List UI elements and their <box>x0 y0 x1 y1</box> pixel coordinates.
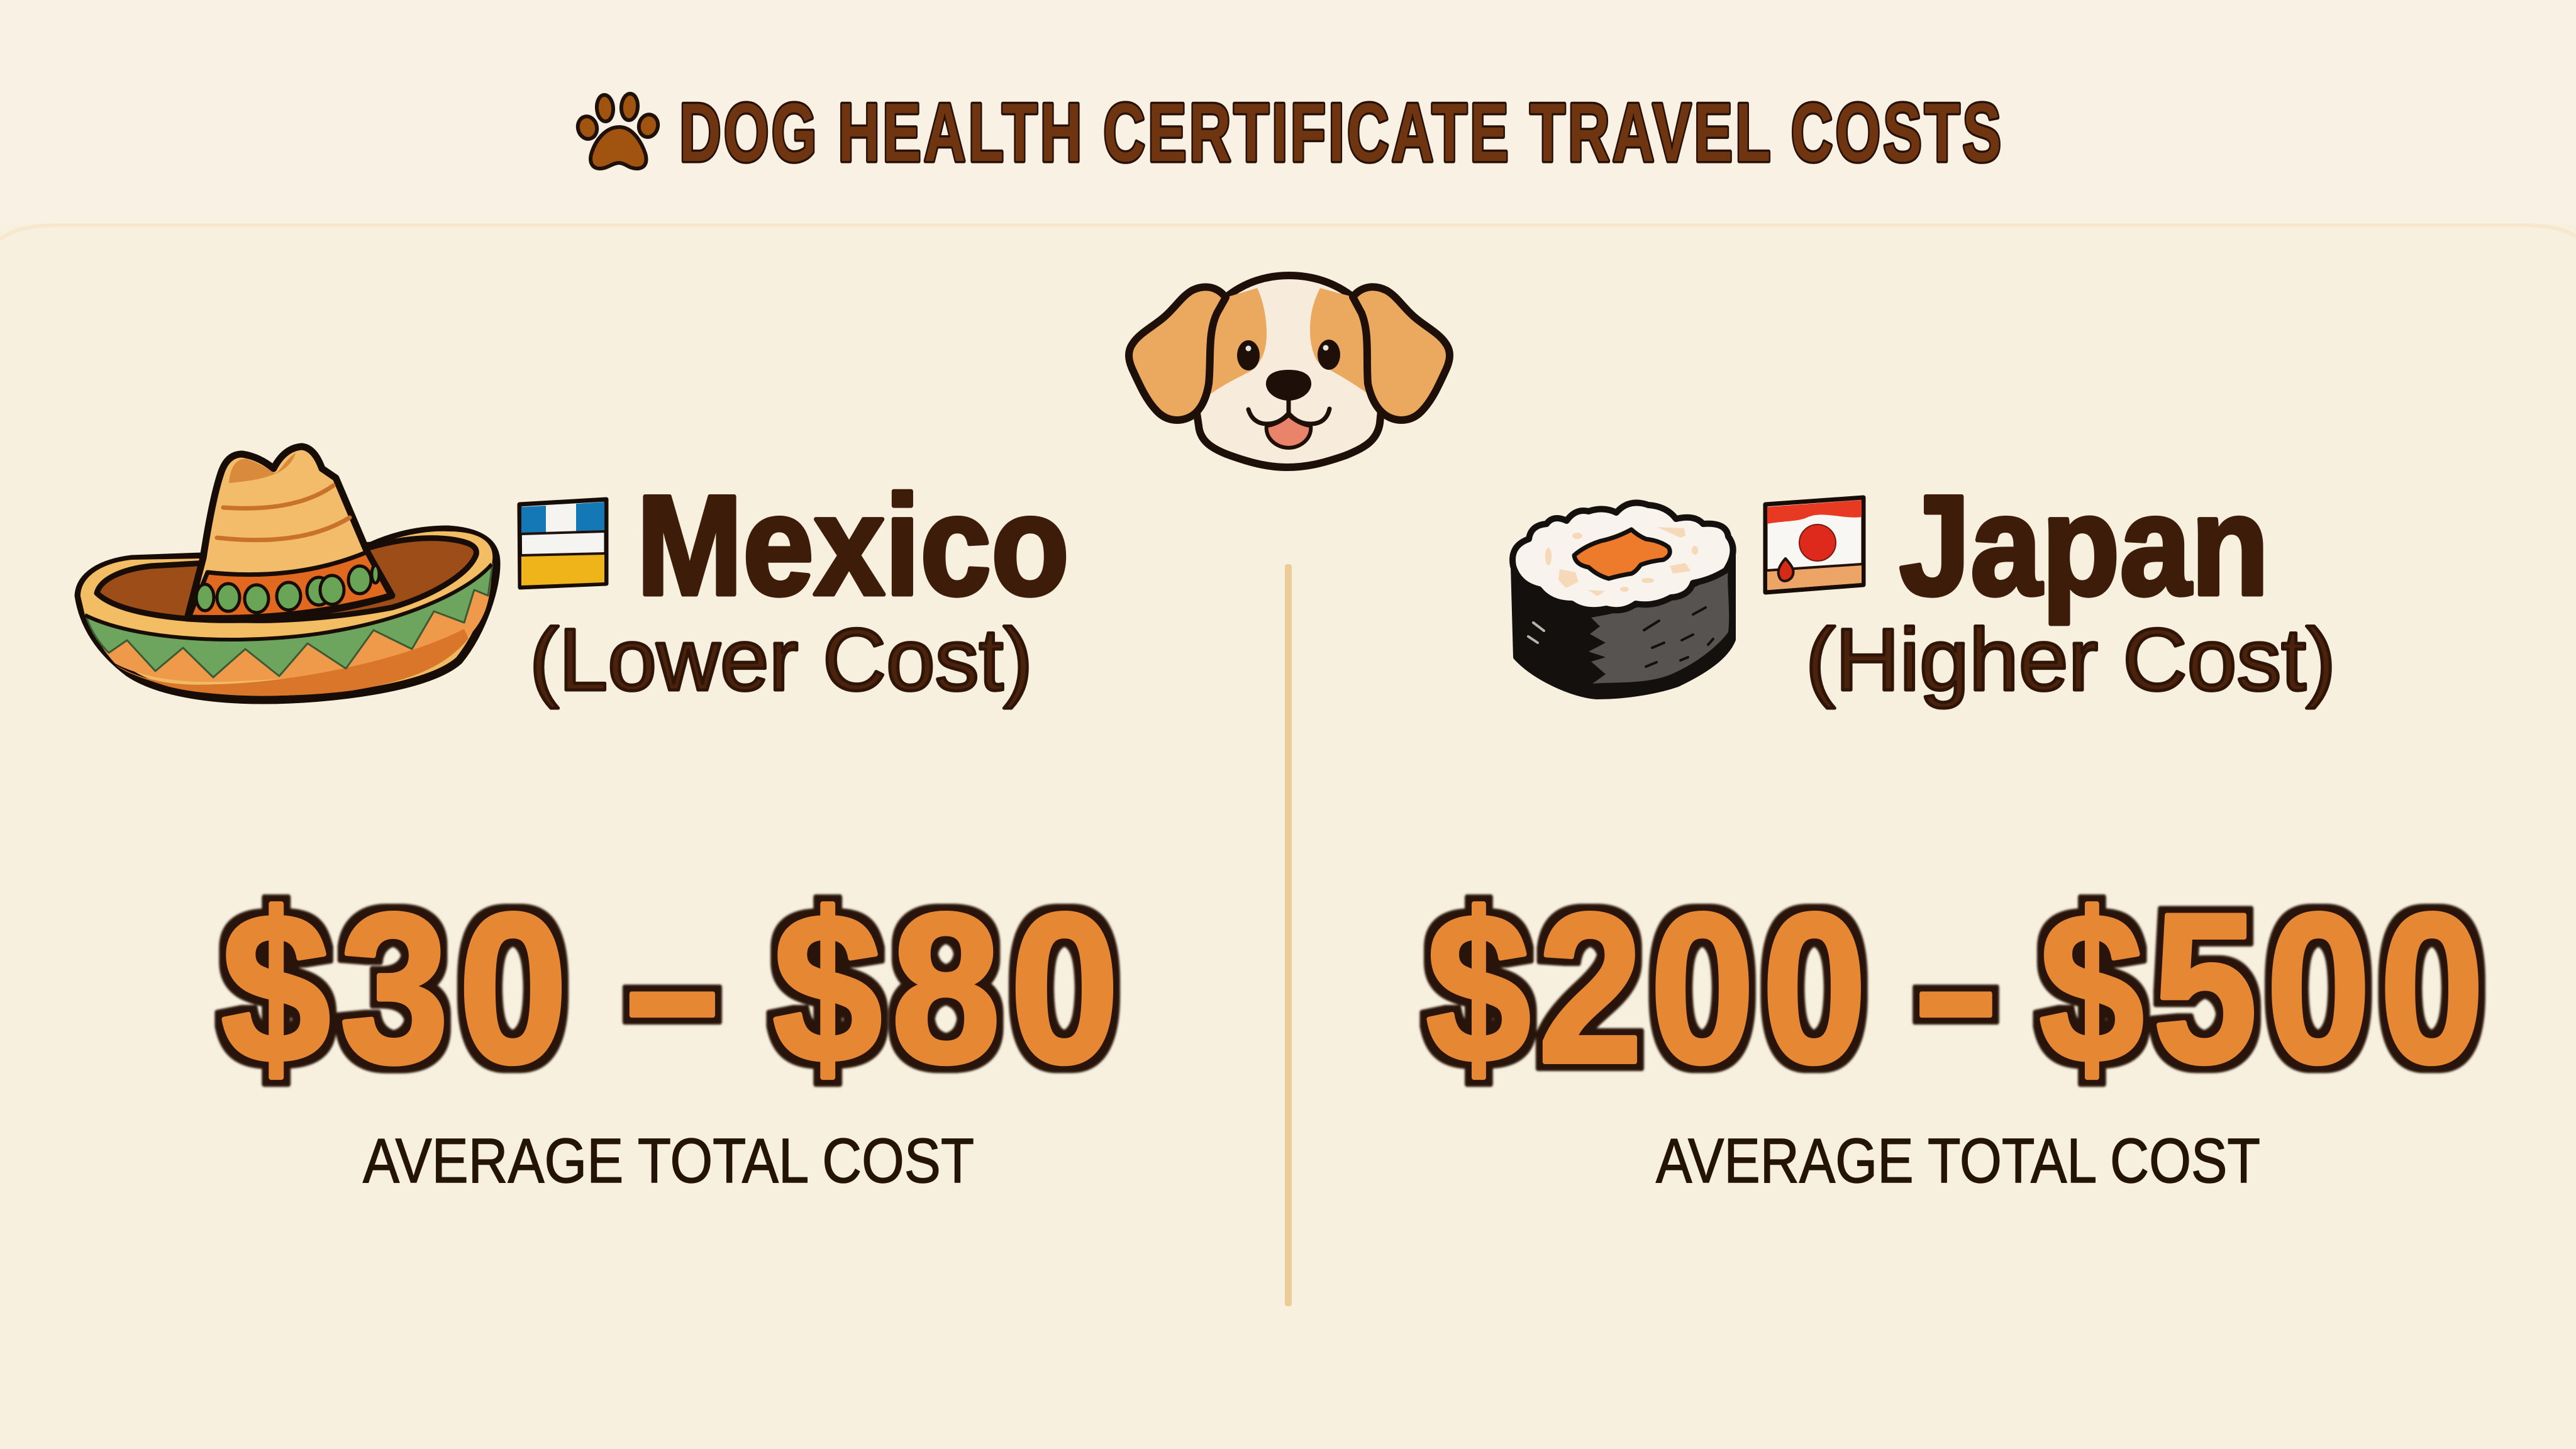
panel: Japan <box>1426 465 2484 1196</box>
sombrero hatband <box>189 552 390 618</box>
price: Japan: $200 <box>1426 870 1867 1107</box>
sombrero green zigzag <box>86 564 492 677</box>
dog eyes <box>1237 340 1340 370</box>
dog right ear <box>1353 287 1450 420</box>
icon: paw print <box>575 93 660 169</box>
icon: sombrero <box>79 447 496 700</box>
subtitle: higher cost: (Higher Cost) <box>1806 610 2336 709</box>
sombrero ovals <box>196 565 379 613</box>
sombrero inner brim <box>97 538 476 620</box>
dog nose <box>1266 370 1311 401</box>
sushi salmon filling <box>1574 530 1670 579</box>
country name: Mexico: Mexico <box>636 465 1069 625</box>
sushi nori highlight <box>1589 568 1729 684</box>
dog tongue <box>1267 415 1311 448</box>
subtitle: lower cost: (Lower Cost) <box>530 610 1033 709</box>
sushi nori marks <box>1644 608 1713 667</box>
country name: Japan: Japan <box>1899 465 2269 625</box>
price: Japan: $500 <box>2040 870 2484 1107</box>
center divider <box>1285 564 1292 1306</box>
sombrero crown shade <box>229 453 296 483</box>
price: Mexico: $80 <box>773 869 1119 1107</box>
sombrero pattern <box>88 569 492 682</box>
price: Japan <box>1426 869 2484 1107</box>
panel: Mexico <box>79 447 1119 1196</box>
dog left patch <box>1210 288 1267 394</box>
title: DOG HEALTH CERTIFICATE TRAVEL COSTS <box>679 87 2001 179</box>
icon: sushi roll <box>1513 502 1733 697</box>
sombrero rim <box>80 531 492 640</box>
caption: Japan average: AVERAGE TOTAL COST <box>1656 1126 2260 1196</box>
dog left ear <box>1129 287 1226 420</box>
sombrero lower band <box>115 629 469 696</box>
sombrero crown <box>187 447 392 619</box>
header <box>575 87 2001 179</box>
price: Mexico: – <box>626 869 718 1107</box>
sushi rice <box>1513 502 1733 610</box>
icon: dog face <box>1129 275 1450 467</box>
icon: Mexico flag <box>519 499 606 587</box>
price: Mexico: $30 <box>221 869 567 1107</box>
dog mouth <box>1248 400 1330 424</box>
caption: Mexico average: AVERAGE TOTAL COST <box>363 1126 974 1196</box>
price: Mexico <box>221 869 1119 1107</box>
sushi rice flecks <box>1545 527 1698 596</box>
icon: Japan flag <box>1765 497 1863 592</box>
price: Japan: – <box>1917 869 1995 1107</box>
dog right patch <box>1310 288 1366 392</box>
